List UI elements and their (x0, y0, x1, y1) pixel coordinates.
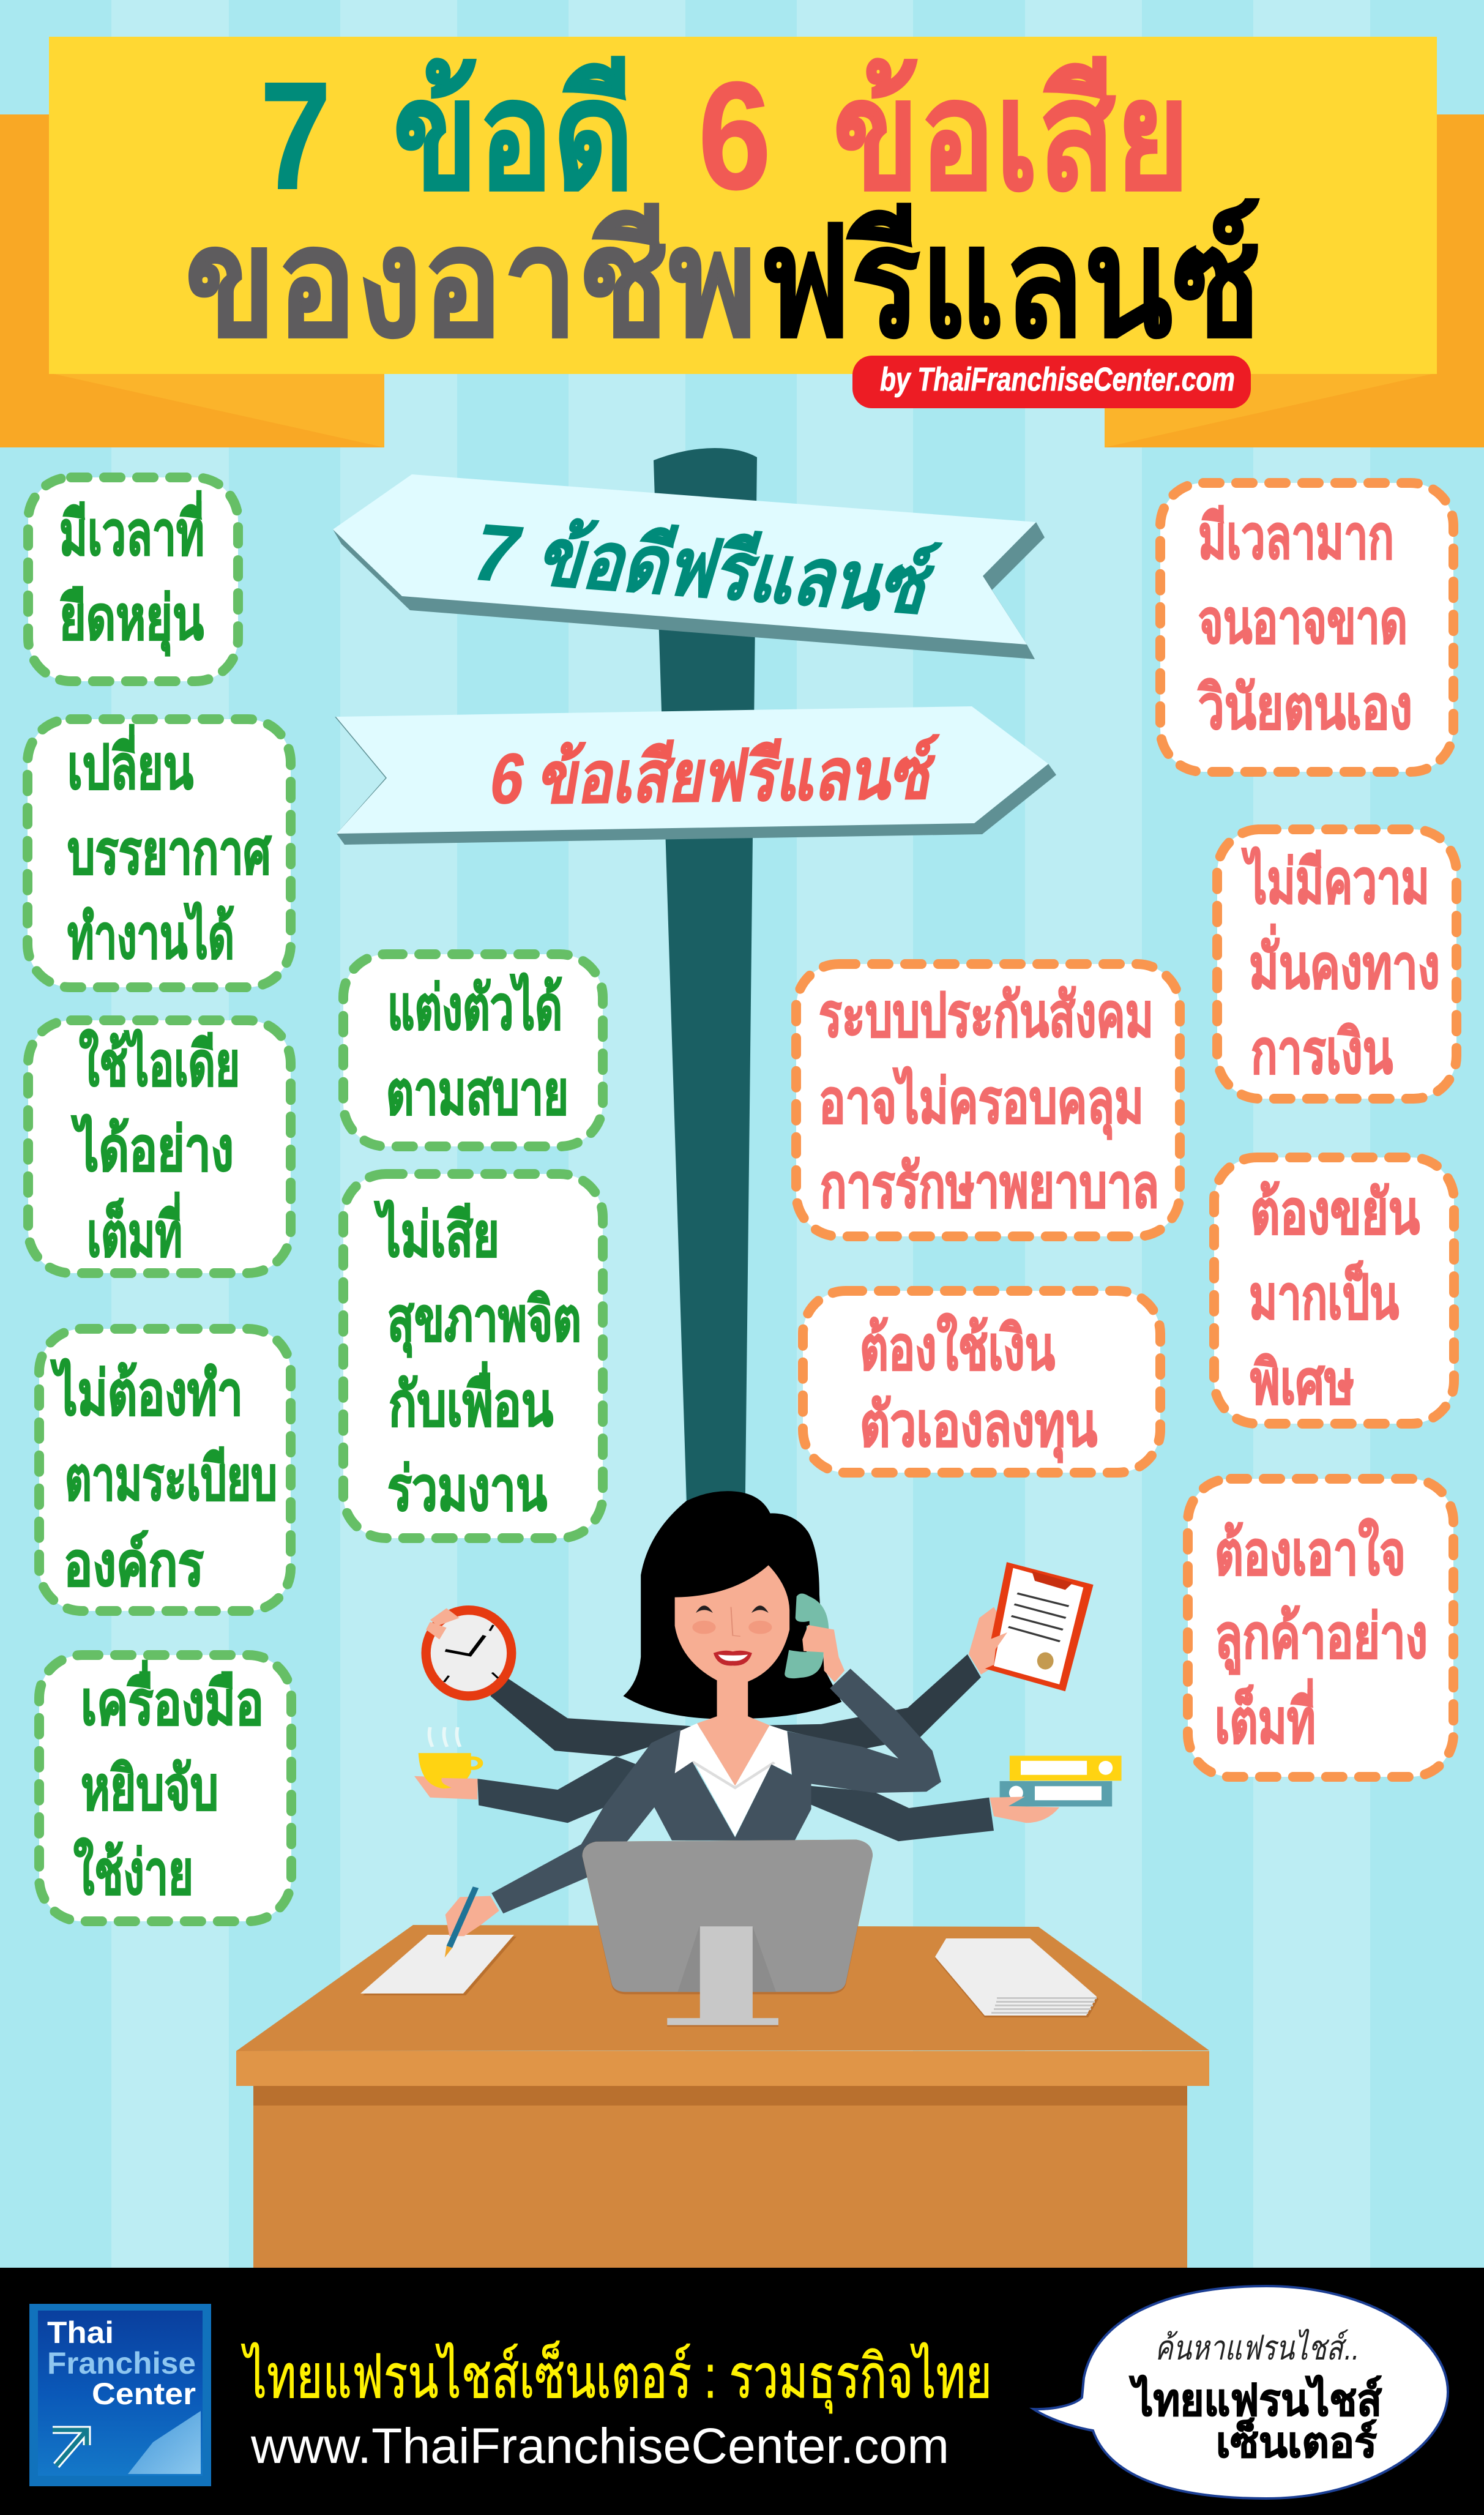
card: own investment: ต้องใช้เงิน (860, 1313, 1055, 1383)
card: dress freely (343, 954, 603, 1146)
card: extra diligence (1214, 1157, 1454, 1424)
hand holding clock (426, 1608, 460, 1639)
footer website address: www.ThaiFranchiseCenter.com (250, 2418, 949, 2474)
card: extra diligence: พิเศษ (1250, 1348, 1354, 1417)
ribbon banner (0, 37, 1484, 447)
card: social security: ระบบประกันสังคม (819, 981, 1154, 1050)
card: no corporate rules: ไม่ต้องทำ (50, 1359, 243, 1428)
signpost pole (654, 448, 757, 1542)
card: no corporate rules (39, 1329, 291, 1611)
card: easy tools: ใช้ง่าย (73, 1837, 193, 1907)
footer bar (0, 2268, 1484, 2515)
writing hand and pencil (445, 1886, 499, 1957)
card: too much time: มีเวลามาก (1198, 503, 1394, 572)
sign: 6 disadvantages (335, 706, 1056, 845)
jacket and front arms (491, 1669, 941, 1913)
title: ของอาชีพ (185, 197, 757, 368)
card: too much time (1160, 483, 1453, 772)
card: easy tools (39, 1655, 291, 1921)
card: easy tools: เครื่องมือ (81, 1660, 264, 1738)
card: financial insecurity (1217, 829, 1456, 1099)
card: dress freely: ตามสบาย (386, 1059, 569, 1127)
folders and hand (990, 1756, 1122, 1823)
card: flexible time (28, 477, 238, 681)
card: no stress with coworkers: กับเพื่อน (389, 1361, 553, 1439)
speech bubble (1034, 2286, 1448, 2498)
card: no stress with coworkers: สุขภาพจิต (387, 1285, 581, 1358)
footer logo: Franchise (47, 2346, 196, 2380)
card: own investment (803, 1291, 1160, 1473)
speech bubble: ค้นหาแฟรนไชส์.. (1153, 2329, 1365, 2367)
card: no stress with coworkers (343, 1174, 603, 1538)
footer tagline: ไทยแฟรนไชส์เซ็นเตอร์ : รวมธุรกิจไทย (241, 2340, 992, 2414)
speech bubble: เซ็นเตอร์ (1216, 2418, 1377, 2466)
card: please customers: เต็มที่ (1215, 1678, 1316, 1756)
woman illustration (414, 1491, 1122, 2027)
footer logo: Thai (47, 2315, 114, 2350)
phone and hand (785, 1594, 845, 1683)
title (185, 50, 1261, 368)
coffee cup and hand (414, 1727, 480, 1799)
title: ข้อดี (393, 50, 634, 221)
card: dress freely: แต่งตัวได้ (387, 973, 562, 1042)
card: financial insecurity: การเงิน (1251, 1018, 1393, 1086)
middle arms (477, 1757, 994, 1841)
card: own investment: ตัวเองลงทุน (860, 1391, 1097, 1463)
clipboard and hand (969, 1562, 1094, 1691)
card: flexible time: ยืดหยุ่น (59, 584, 204, 656)
card: easy tools: หยิบจับ (81, 1754, 218, 1823)
face and neck (675, 1565, 789, 1786)
card: change atmosphere: เปลี่ยน (67, 724, 193, 802)
title: 7 (260, 50, 331, 221)
footer logo: Center (92, 2377, 196, 2411)
speech bubble: ไทยแฟรนไชส์ (1129, 2374, 1382, 2425)
card: change atmosphere (28, 719, 291, 987)
paper sheet on desk (360, 1935, 516, 1995)
card: please customers: ต้องเอาใจ (1215, 1518, 1406, 1588)
footer logo (29, 2304, 211, 2486)
sign: 6 disadvantages: 6 ข้อเสียฟรีแลนซ์ (485, 734, 940, 818)
desk (236, 1925, 1209, 2268)
card: please customers (1188, 1479, 1453, 1777)
clock (421, 1605, 516, 1701)
hair (623, 1491, 841, 1719)
title: 6 (698, 50, 771, 221)
card: social security: การรักษาพยาบาล (820, 1152, 1159, 1220)
card: extra diligence: ต้องขยัน (1250, 1178, 1420, 1247)
title: ฟรีแลนซ์ (759, 197, 1261, 368)
card: change atmosphere: ทำงานได้ (67, 902, 234, 971)
byline pill (852, 356, 1251, 408)
monitor (583, 1840, 873, 2027)
sign: 7 advantages: 7 (462, 508, 532, 599)
card: no stress with coworkers: ไม่เสีย (374, 1200, 499, 1269)
card: social security (796, 964, 1180, 1236)
card: change atmosphere: บรรยากาศ (67, 818, 272, 887)
card: use ideas (28, 1020, 291, 1273)
card: no corporate rules: ตามระเบียบ (65, 1444, 277, 1513)
sign: 7 advantages: ข้อดีฟรีแลนซ์ (530, 513, 943, 630)
card: use ideas: ใช้ไอเดีย (79, 1029, 240, 1099)
card: no corporate rules: องค์กร (64, 1530, 204, 1599)
card: extra diligence: มากเป็น (1249, 1260, 1399, 1332)
paper stack on desk (935, 1938, 1098, 2017)
card: no stress with coworkers: ร่วมงาน (387, 1455, 547, 1523)
rear arms (490, 1654, 981, 1757)
byline pill: by ThaiFranchiseCenter.com (880, 361, 1235, 398)
card: flexible time: มีเวลาที่ (59, 490, 204, 568)
card: too much time: วินัยตนเอง (1198, 673, 1412, 742)
card: use ideas: ได้อย่าง (71, 1115, 234, 1184)
card: social security: อาจไม่ครอบคลุม (819, 1067, 1144, 1140)
card: use ideas: เต็มที่ (87, 1192, 182, 1269)
title: ข้อเสีย (833, 50, 1190, 221)
white shirt (675, 1724, 792, 1837)
facial features (692, 1605, 772, 1665)
sign: 7 advantages (333, 474, 1045, 659)
